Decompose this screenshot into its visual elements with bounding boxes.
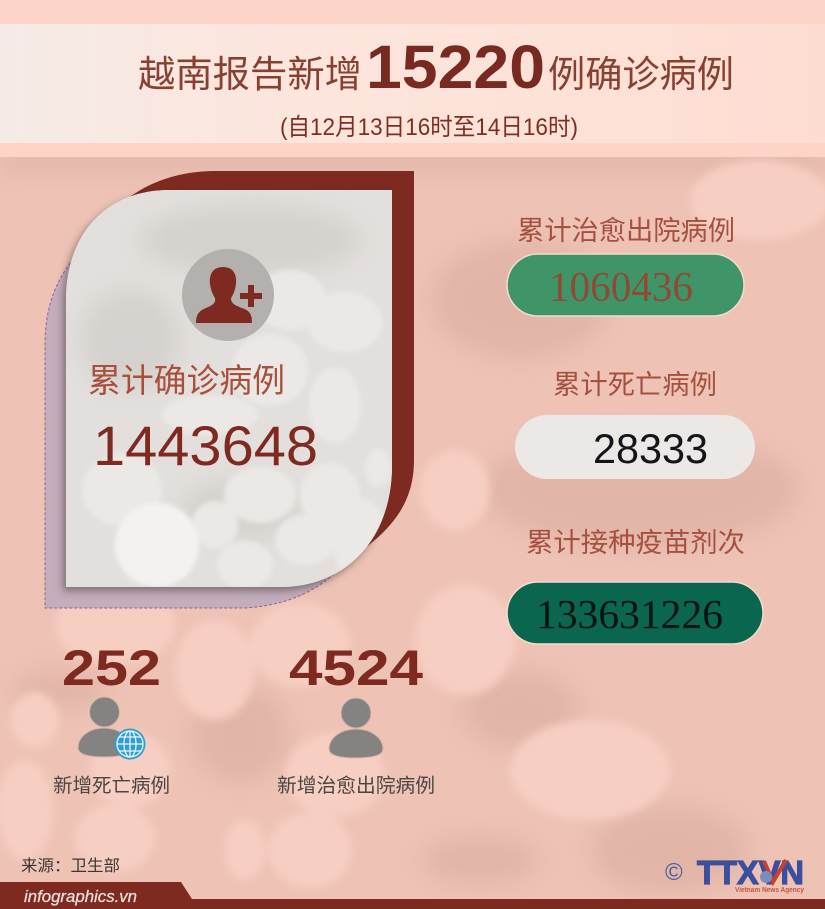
label: 新增治愈出院病例 bbox=[277, 775, 435, 797]
value: 4524 bbox=[289, 640, 423, 696]
icon: person with plus bbox=[182, 249, 274, 341]
label: 累计死亡病例 bbox=[553, 370, 717, 400]
title lead text: 越南报告新增 bbox=[138, 54, 362, 95]
header background bbox=[0, 0, 825, 157]
logo: TTXVN bbox=[665, 854, 804, 894]
value: 252 bbox=[62, 640, 161, 696]
icon: person bbox=[78, 697, 130, 757]
label: 累计接种疫苗剂次 bbox=[526, 528, 745, 558]
agency name: Vietnam News Agency bbox=[735, 887, 804, 894]
subtitle date range: (自12月13日16时至14日16时) bbox=[280, 114, 578, 141]
pill bbox=[507, 582, 763, 644]
label: cumulative confirmed: 累计确诊病例 bbox=[88, 362, 285, 399]
source: 来源：卫生部 bbox=[21, 857, 120, 875]
panel: cumulative confirmed cases bbox=[45, 171, 414, 608]
stat: new deaths bbox=[53, 640, 170, 797]
value: 133631226 bbox=[536, 591, 723, 637]
footer site name: infographics.vn bbox=[24, 887, 137, 906]
label: 新增死亡病例 bbox=[53, 775, 170, 797]
lavender dashed backing shape bbox=[45, 240, 392, 608]
icon: globe bbox=[114, 728, 146, 760]
value: 28333 bbox=[593, 425, 708, 472]
stat: cumulative vaccine doses bbox=[507, 528, 763, 644]
value: 1060436 bbox=[549, 265, 693, 311]
logo letters: TTXVN bbox=[697, 854, 804, 891]
stat: new recoveries bbox=[277, 640, 435, 797]
icon: person bbox=[329, 698, 383, 758]
title bbox=[138, 33, 734, 101]
logo red check and globe bbox=[760, 860, 786, 883]
pill bbox=[515, 415, 755, 479]
pill bbox=[507, 254, 744, 316]
stat: cumulative deaths bbox=[515, 370, 755, 479]
card texture bbox=[66, 190, 392, 589]
dark red frame shape bbox=[117, 171, 414, 548]
light card bbox=[66, 190, 392, 587]
stat: cumulative recovered bbox=[507, 216, 744, 316]
label: 累计治愈出院病例 bbox=[517, 216, 735, 246]
copyright mark: © bbox=[665, 859, 683, 886]
title number: 15220 bbox=[366, 33, 545, 101]
footer bar bbox=[0, 882, 825, 909]
value: cumulative confirmed: 1443648 bbox=[93, 414, 318, 477]
title trailing text: 例确诊病例 bbox=[548, 54, 734, 95]
